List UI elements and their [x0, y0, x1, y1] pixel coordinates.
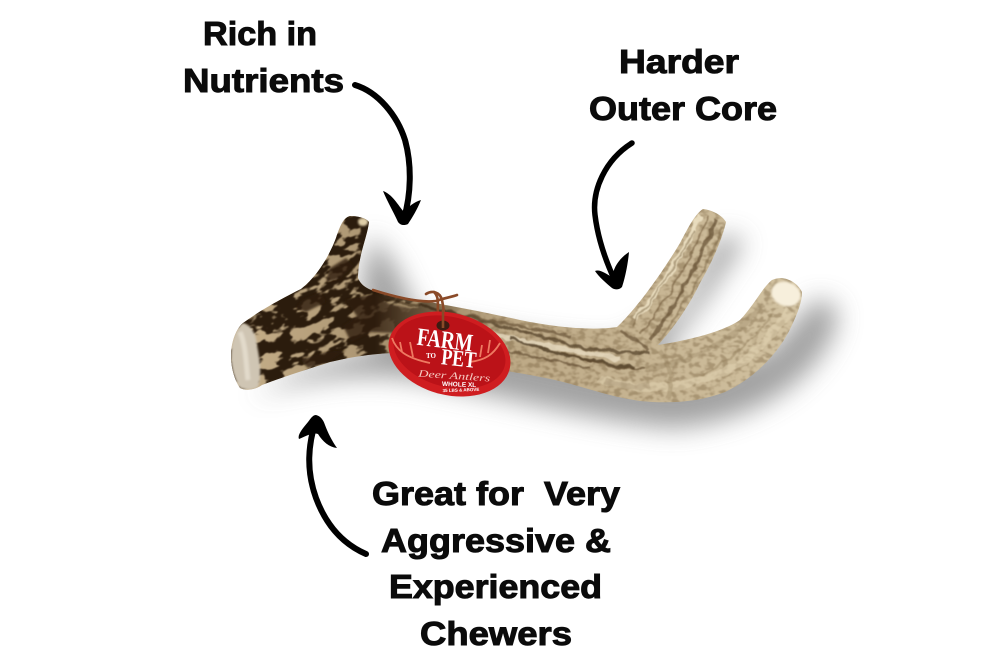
tag disc	[379, 299, 520, 409]
tag antler art	[392, 338, 500, 363]
product tag	[379, 299, 520, 409]
label: Rich in Nutrients: Rich in	[203, 15, 317, 52]
label: Great for Very Aggressive & Experienced Chewers: Experienced	[389, 568, 602, 605]
label: Harder Outer Core: Harder	[619, 43, 739, 80]
mottled speckle on the smooth beam	[470, 209, 802, 402]
tag text: Deer Antlers	[416, 368, 491, 385]
tag text	[415, 324, 491, 393]
label: Great for Very Aggressive & Experienced Chewers: Aggressive &	[381, 522, 611, 559]
tag hole	[436, 320, 450, 330]
tag text: FARM	[415, 324, 474, 357]
tag text: PET	[440, 344, 477, 373]
tag text: WHOLE XL	[442, 381, 476, 389]
leather cord	[373, 290, 457, 328]
label: Great for Very Aggressive & Experienced Chewers: Great for Very	[372, 475, 621, 512]
tag text: 35 LBS & ABOVE	[442, 387, 479, 393]
label: Rich in Nutrients: Nutrients	[183, 62, 344, 99]
tag text: TO	[426, 352, 437, 360]
label: Harder Outer Core: Outer Core	[589, 90, 777, 127]
antler shadow	[250, 235, 837, 428]
antler	[231, 209, 802, 402]
antler body	[231, 209, 802, 402]
pale and dark grain on the smooth beam	[385, 215, 790, 398]
arrow: to outer core	[595, 143, 632, 289]
label: Harder Outer Core	[589, 43, 777, 127]
label: Great for Very Aggressive & Experienced Chewers: Chewers	[420, 615, 572, 652]
label: Rich in Nutrients	[183, 15, 344, 99]
antler cut ends	[231, 218, 804, 390]
arrow: from chewers label	[299, 415, 366, 554]
label: Great for Very Aggressive & Experienced Chewers	[372, 475, 621, 652]
arrow: to antler top	[355, 85, 421, 225]
burr texture on the base	[231, 216, 460, 390]
